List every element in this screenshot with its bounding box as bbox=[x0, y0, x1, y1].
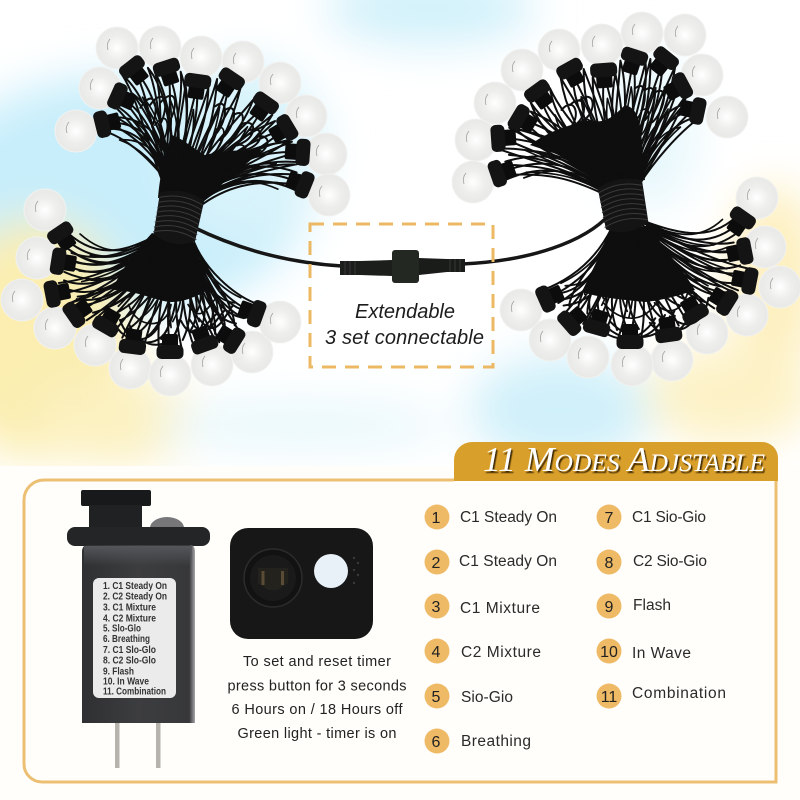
mode 9 bbox=[596, 594, 671, 618]
adapter label: 7. C1 Slo-Glo bbox=[103, 645, 156, 656]
adapter neck bbox=[89, 505, 142, 531]
mode 6 bbox=[424, 728, 531, 754]
callout text bbox=[325, 301, 484, 349]
connection cable bbox=[193, 214, 610, 266]
mode 1: C1 Steady On bbox=[460, 509, 557, 526]
mode 11: 11 bbox=[601, 689, 617, 706]
mode 1 bbox=[424, 504, 557, 530]
wires: left bundle bbox=[49, 61, 312, 357]
adapter label: 3. C1 Mixture bbox=[103, 602, 156, 614]
mode 2: C1 Steady On bbox=[459, 553, 557, 570]
timer instructions bbox=[228, 654, 406, 742]
timer instructions: Green light - timer is on bbox=[238, 726, 396, 742]
timer instructions: press button for 3 seconds bbox=[228, 678, 406, 694]
adapter shoulder highlight bbox=[84, 546, 192, 566]
adapter prongs bbox=[115, 722, 160, 768]
mode 8 bbox=[596, 550, 707, 574]
timer button bbox=[314, 554, 348, 588]
bulbs: right upper arc bbox=[452, 12, 748, 204]
callout text: 3 set connectable bbox=[325, 327, 484, 349]
mode 5 bbox=[424, 684, 513, 708]
sensor dots bbox=[353, 557, 359, 584]
callout text: Extendable bbox=[355, 301, 455, 323]
lamp caps: right cluster bbox=[486, 44, 759, 349]
panel: rounded modes frame bbox=[24, 480, 776, 782]
mode 1: 1 bbox=[432, 510, 441, 527]
adapter label: 2. C2 Steady On bbox=[103, 592, 167, 602]
bulbs: left upper arc bbox=[54, 26, 350, 216]
adapter body bbox=[82, 545, 195, 723]
wires: right bundle bbox=[490, 51, 756, 348]
adapter: plug-in controller bbox=[67, 490, 210, 768]
mode 7: C1 Sio-Gio bbox=[632, 509, 706, 526]
timer instructions: 6 Hours on / 18 Hours off bbox=[232, 702, 403, 718]
callout: dashed extendable box bbox=[310, 224, 493, 367]
bulbs: left lower arc bbox=[0, 188, 302, 396]
mode 3: C1 Mixture bbox=[460, 600, 540, 617]
adapter label: 10. In Wave bbox=[103, 676, 149, 688]
mode 7 bbox=[596, 504, 706, 530]
mode 5: Sio-Gio bbox=[461, 689, 513, 706]
mode 3 bbox=[424, 594, 540, 618]
mode 11 bbox=[596, 684, 726, 708]
timer unit photo bbox=[230, 528, 373, 639]
mode 6: Breathing bbox=[461, 733, 531, 750]
bulbs: right lower arc bbox=[500, 176, 800, 386]
mode 11: Combination bbox=[632, 685, 726, 702]
socket bbox=[244, 549, 302, 607]
adapter label: 6. Breathing bbox=[103, 634, 150, 645]
mode 10: In Wave bbox=[632, 645, 691, 662]
adapter label: 9. Flash bbox=[103, 666, 134, 678]
mode 8: C2 Sio-Gio bbox=[633, 553, 707, 570]
heading tab: 11 Modes Adjstable: 11 Modes Adjstable bbox=[483, 440, 765, 479]
string lights: left cluster bbox=[0, 26, 350, 396]
mode 6: 6 bbox=[432, 734, 441, 751]
coil: right cable wrap bbox=[597, 175, 650, 235]
mode 5: 5 bbox=[432, 689, 441, 706]
mode 4: 4 bbox=[432, 644, 441, 661]
adapter label: 4. C2 Mixture bbox=[103, 614, 156, 624]
mode list: column 2 bbox=[596, 504, 726, 708]
adapter label: 8. C2 Slo-Glo bbox=[103, 656, 156, 666]
adapter label: 11. Combination bbox=[103, 686, 166, 698]
timer instructions: To set and reset timer bbox=[243, 654, 391, 670]
mode 10 bbox=[596, 638, 691, 664]
mode 10: 10 bbox=[600, 644, 618, 661]
mode 4 bbox=[424, 638, 541, 664]
mode 2: 2 bbox=[432, 555, 441, 572]
coil: left cable wrap bbox=[152, 188, 205, 248]
adapter bump bbox=[150, 517, 184, 539]
adapter label bbox=[93, 578, 176, 698]
adapter knob bbox=[81, 490, 151, 506]
mode list: column 1 bbox=[424, 504, 557, 754]
mode 9: Flash bbox=[633, 597, 671, 614]
lamp caps: left cluster bbox=[43, 53, 316, 359]
string lights: right cluster bbox=[452, 12, 800, 386]
mode 2 bbox=[424, 550, 557, 574]
adapter label: 5. Slo-Glo bbox=[103, 624, 141, 634]
mode 4: C2 Mixture bbox=[461, 644, 541, 661]
adapter label: 1. C1 Steady On bbox=[103, 581, 167, 592]
mode 3: 3 bbox=[432, 599, 441, 616]
waterproof connector bbox=[340, 250, 465, 283]
mode 9: 9 bbox=[605, 599, 614, 616]
mode 7: 7 bbox=[605, 510, 614, 527]
adapter flange bbox=[67, 527, 210, 546]
mode 8: 8 bbox=[605, 555, 614, 572]
